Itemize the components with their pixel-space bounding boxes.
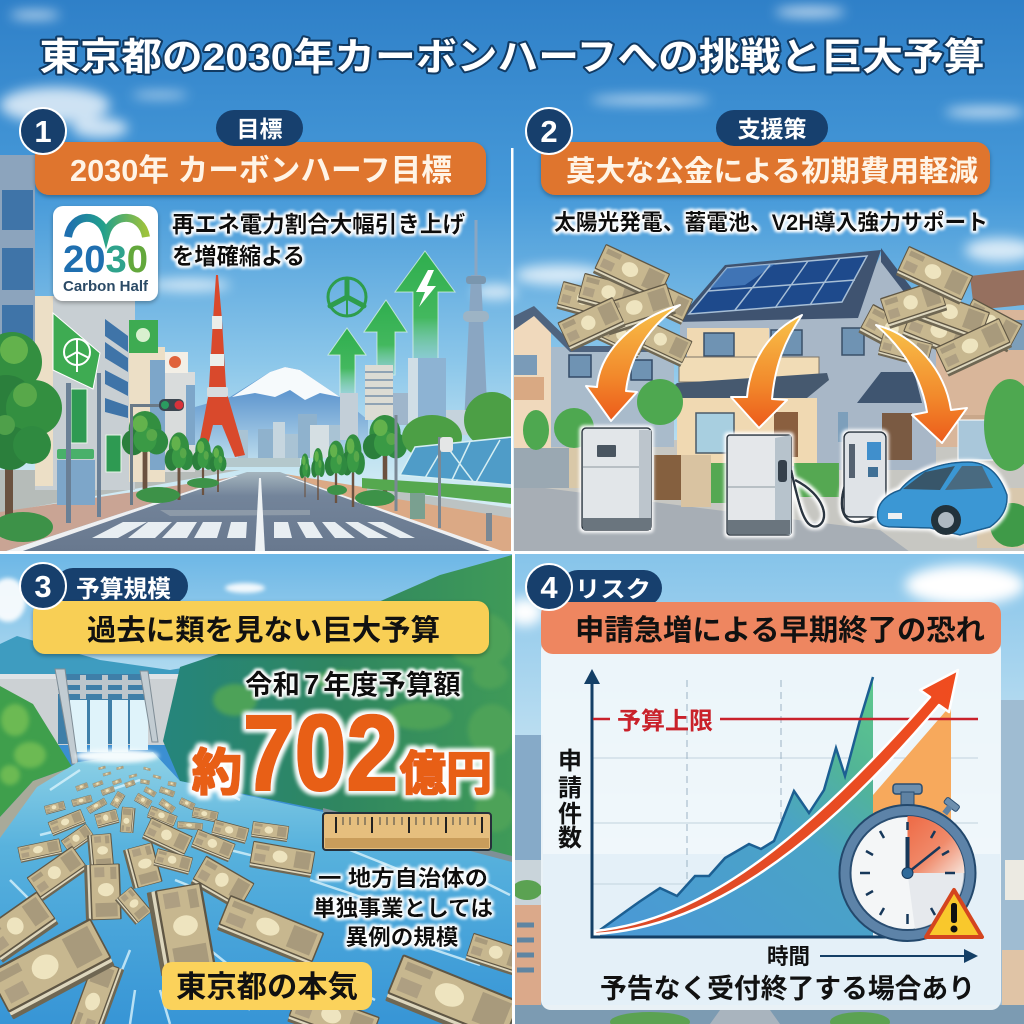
panel 3: budget scene bbox=[0, 554, 529, 1024]
distant mountains bbox=[0, 636, 180, 674]
panel 4 header bbox=[526, 564, 1001, 654]
scale description: 一 地方自治体の bbox=[318, 866, 488, 891]
budget amount bbox=[192, 692, 492, 813]
renewable energy text: 再エネ電力割合大幅引き上げ bbox=[172, 211, 465, 237]
budget amount: 約 bbox=[192, 745, 242, 801]
x axis arrow bbox=[820, 949, 978, 963]
number badge: 2 bbox=[540, 114, 558, 149]
Carbon Half logo card bbox=[53, 206, 158, 301]
panel 3 header bbox=[20, 563, 489, 654]
scale description: 異例の規模 bbox=[346, 925, 458, 950]
budget amount: 702 bbox=[243, 692, 398, 813]
heading text: 2030年 カーボンハーフ目標 bbox=[70, 153, 452, 188]
number badge: 4 bbox=[540, 570, 558, 605]
panel 4: translucent chart card bbox=[541, 640, 1001, 1010]
background sky bbox=[0, 0, 1024, 560]
right pile of banknotes bbox=[858, 247, 1022, 377]
category label: リスク bbox=[575, 576, 651, 602]
category pill bbox=[55, 568, 188, 604]
scale description bbox=[313, 866, 493, 950]
neighbouring right house bbox=[936, 270, 1024, 460]
panel 4: risk background bbox=[507, 554, 1024, 1024]
category label: 支援策 bbox=[738, 116, 806, 142]
title: 東京都の2030年カーボンハーフへの挑戦と巨大予算 bbox=[40, 37, 984, 79]
left pile of banknotes bbox=[556, 245, 693, 367]
y axis label: 請 bbox=[558, 775, 582, 802]
number badge bbox=[526, 108, 572, 154]
number badge bbox=[526, 564, 572, 610]
icon: wind turbine bbox=[328, 278, 366, 316]
y axis label: 数 bbox=[558, 825, 582, 852]
ground and road bbox=[514, 440, 1024, 552]
category pill bbox=[560, 570, 662, 606]
axes bbox=[592, 680, 890, 937]
sky bbox=[0, 554, 512, 670]
neighbouring left house bbox=[514, 306, 674, 450]
y axis label: 申 bbox=[558, 748, 582, 775]
electric car bbox=[877, 462, 1007, 535]
Carbon Half logo card: Carbon Half bbox=[63, 278, 149, 295]
applications area bbox=[600, 677, 873, 937]
Tokyo's seriousness callout: 東京都の本気 bbox=[176, 971, 358, 1004]
x axis label: 時間 bbox=[767, 944, 810, 969]
right-side buildings bbox=[340, 358, 473, 440]
waterfall foam bbox=[75, 749, 159, 763]
road with crosswalk bbox=[3, 472, 505, 552]
y axis label bbox=[558, 748, 582, 852]
panel 2: subsidy scene bbox=[514, 245, 1024, 552]
budget ceiling label: 予算上限 bbox=[617, 708, 713, 735]
renewable energy text bbox=[172, 211, 465, 269]
street trees bbox=[122, 411, 407, 507]
distant skyline bbox=[238, 414, 341, 458]
large left tree bbox=[0, 332, 62, 517]
category pill bbox=[716, 110, 828, 146]
Tokyo's seriousness callout bbox=[162, 962, 372, 1010]
water highlights bbox=[10, 770, 510, 1024]
solar greenhouse bbox=[362, 437, 512, 504]
number badge bbox=[20, 108, 66, 154]
support description: 太陽光発電、蓄電池、V2H導入強力サポート bbox=[554, 210, 988, 235]
dam with waterfalls bbox=[0, 669, 200, 764]
heading text: 莫大な公金による初期費用軽減 bbox=[566, 155, 978, 188]
renewable energy text: を増確縮よる bbox=[172, 243, 305, 269]
panel 2 header bbox=[526, 108, 990, 195]
number badge: 3 bbox=[34, 569, 52, 604]
number badge: 1 bbox=[34, 114, 52, 149]
sign poles bbox=[66, 373, 101, 523]
Tokyo Skytree bbox=[463, 220, 489, 425]
traffic signals and lamp posts bbox=[130, 399, 492, 541]
risk note: 予告なく受付終了する場合あり bbox=[600, 974, 975, 1004]
heading bar bbox=[33, 601, 489, 654]
fence, gate post and shrubs bbox=[514, 379, 1024, 548]
budget fiscal year label: 令和7年度予算額 bbox=[245, 669, 461, 700]
EV charger bbox=[842, 432, 886, 522]
left-side buildings bbox=[0, 155, 195, 505]
left battery unit bbox=[582, 428, 651, 530]
panel 1: goal scene bbox=[0, 155, 520, 552]
ground and pavements bbox=[0, 470, 512, 552]
Mount Fuji bbox=[190, 367, 368, 458]
green arrows showing growth bbox=[328, 251, 455, 395]
category pill bbox=[216, 110, 303, 146]
y axis label: 件 bbox=[558, 801, 582, 828]
category label: 予算規模 bbox=[76, 576, 171, 603]
left forest bbox=[0, 686, 75, 845]
clouds bbox=[507, 565, 1024, 626]
arrows from money to equipment bbox=[586, 305, 967, 443]
panel 1 header bbox=[20, 108, 486, 195]
right forest hillside bbox=[163, 555, 516, 866]
clouds bbox=[0, 578, 265, 622]
y axis arrowhead bbox=[584, 669, 600, 684]
category label: 目標 bbox=[236, 116, 282, 142]
icon: stopwatch bbox=[840, 784, 976, 941]
icon: warning triangle bbox=[926, 890, 982, 937]
heading bar bbox=[541, 142, 990, 195]
centre battery with charger bbox=[727, 435, 824, 535]
grid lines bbox=[592, 680, 978, 937]
city buildings bbox=[512, 700, 1024, 1024]
Tokyo Tower bbox=[197, 275, 245, 457]
rising red arrow bbox=[595, 670, 958, 934]
Carbon Half logo card: 2030 bbox=[63, 239, 148, 281]
river bbox=[0, 752, 512, 1024]
floating banknotes bbox=[0, 766, 529, 1024]
icon: lightning bolt bbox=[416, 270, 436, 307]
applications line bbox=[600, 677, 873, 930]
budget amount: 億円 bbox=[400, 747, 492, 800]
line chart: applications over time bbox=[558, 669, 978, 969]
decorative clouds in sky bbox=[0, 7, 1024, 299]
heading text: 過去に類を見ない巨大予算 bbox=[87, 614, 440, 647]
back bushes bbox=[402, 392, 511, 453]
main house with solar panels bbox=[661, 248, 945, 470]
heading text: 申請急増による早期終了の恐れ bbox=[575, 614, 985, 647]
green shop signs bbox=[53, 313, 188, 472]
icon: ruler bbox=[323, 813, 491, 850]
scale description: 単独事業としては bbox=[313, 896, 493, 921]
orange overflow area bbox=[873, 705, 951, 880]
number badge bbox=[20, 563, 66, 609]
budget ceiling line bbox=[593, 718, 978, 720]
heading bar bbox=[541, 602, 1001, 654]
heading bar bbox=[35, 142, 486, 195]
overpass bbox=[225, 458, 300, 467]
low hedges bbox=[0, 478, 395, 542]
